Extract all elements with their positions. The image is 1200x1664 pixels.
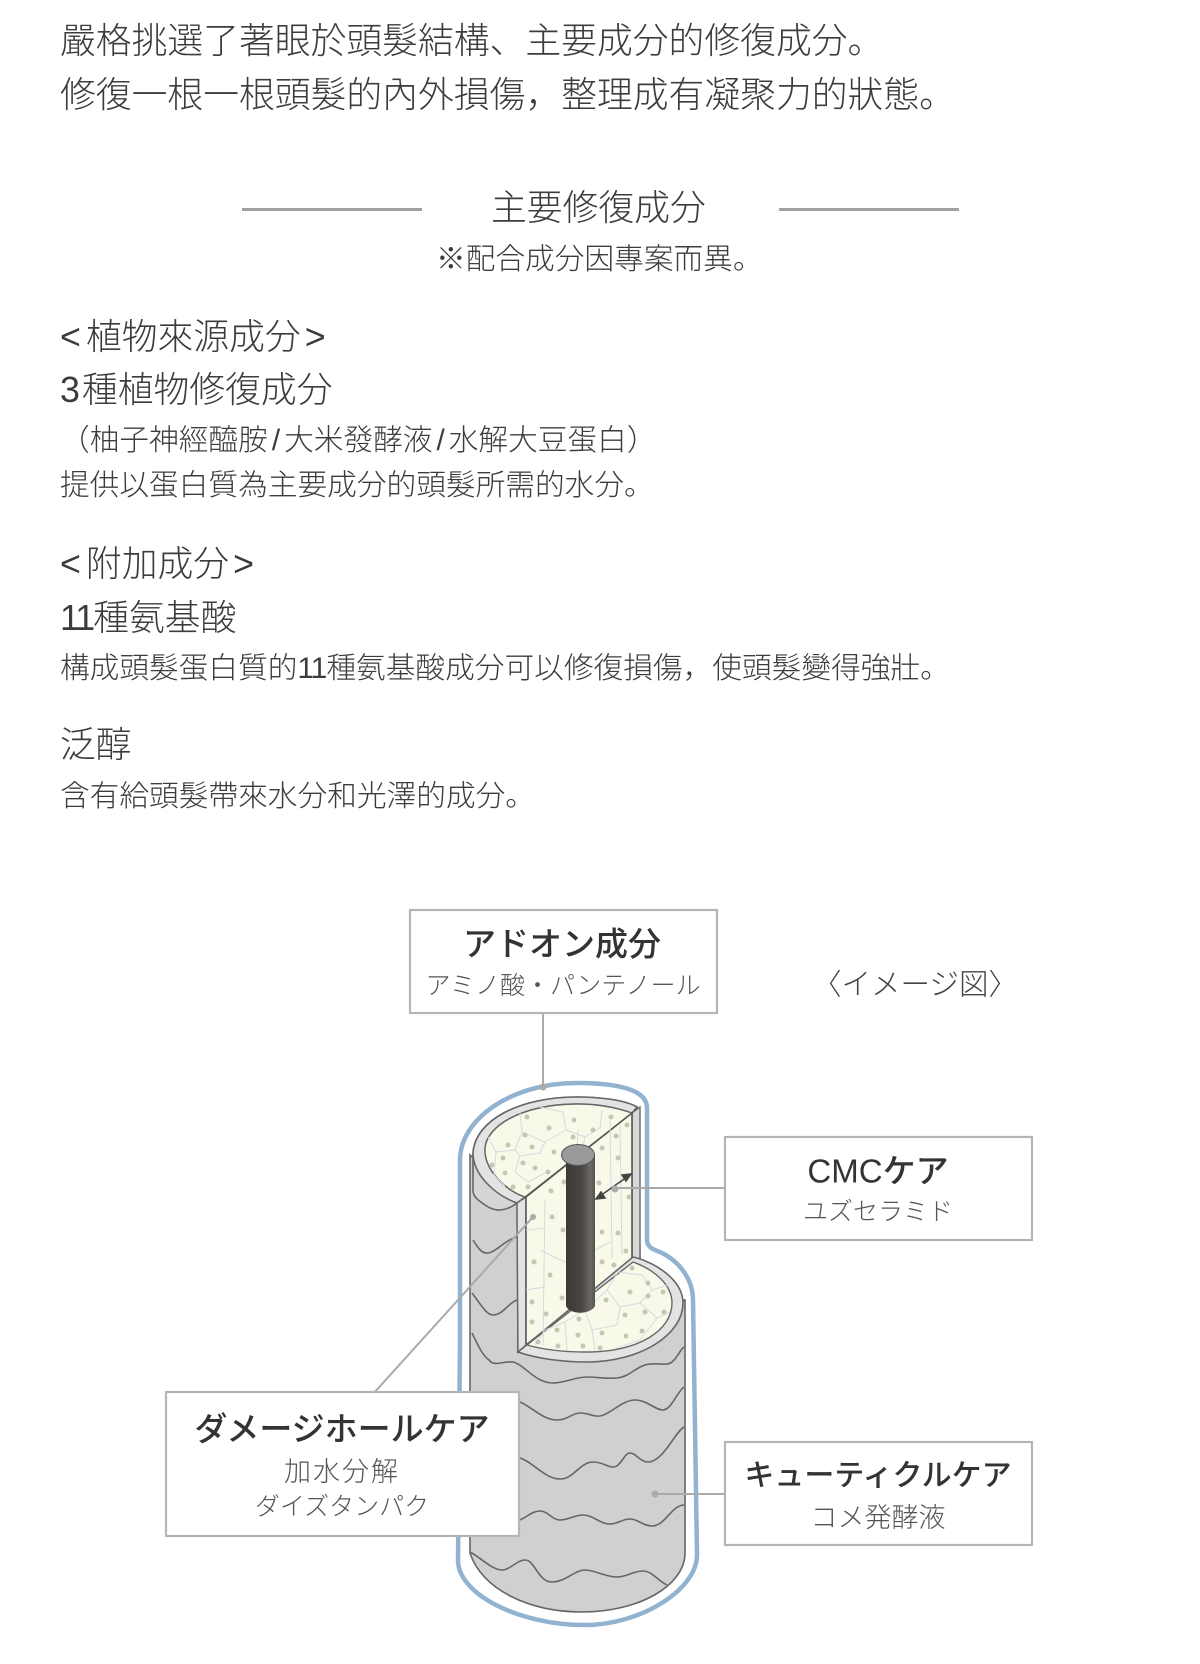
lower disc ring bbox=[518, 1257, 683, 1362]
add-on ingredients block: amino acids: 構成頭髮蛋白質的11種氨基酸成分可以修復損傷，使頭髮變得強壯。 bbox=[60, 652, 950, 685]
label box: add-on ingredients bbox=[410, 910, 717, 1013]
plant-derived ingredients block bbox=[60, 317, 657, 502]
plant-derived ingredients block: （柚子神經醯胺/大米發酵液/水解大豆蛋白） bbox=[60, 424, 657, 457]
intro text: 修復一根一根頭髮的內外損傷，整理成有凝聚力的狀態。 bbox=[60, 75, 955, 115]
plant-derived ingredients block: 提供以蛋白質為主要成分的頭髮所需的水分。 bbox=[60, 469, 654, 502]
cream inner: top half-disc bbox=[485, 1104, 632, 1197]
add-on ingredients block: amino acids: <附加成分> bbox=[60, 544, 257, 584]
gray cuticle body bbox=[470, 1155, 685, 1612]
label box: cuticle care bbox=[725, 1442, 1032, 1545]
label box: CMC care: ユズセラミド bbox=[803, 1198, 953, 1226]
label box: CMC care bbox=[725, 1137, 1032, 1240]
cream inner: lower half-disc bbox=[527, 1262, 672, 1352]
double arrow: CMC width bbox=[596, 1174, 631, 1199]
add-on ingredients block: amino acids: 11種氨基酸 bbox=[60, 598, 236, 638]
add-on ingredients block: panthenol bbox=[60, 725, 535, 813]
upper half: ring and shoulder bbox=[473, 1097, 640, 1352]
label box: add-on ingredients: アドオン成分 bbox=[463, 926, 661, 962]
blue outer coating outline bbox=[458, 1083, 697, 1625]
add-on ingredients block: amino acids bbox=[60, 544, 950, 685]
section heading: 主要修復成分 bbox=[242, 188, 959, 276]
cut face wall strips bbox=[517, 1197, 526, 1352]
label box: add-on ingredients: アミノ酸・パンテノール bbox=[425, 972, 701, 1000]
section heading: 主要修復成分: 主要修復成分 bbox=[491, 188, 706, 228]
add-on ingredients block: panthenol: 泛醇 bbox=[60, 725, 132, 765]
label box: cuticle care: コメ発酵液 bbox=[810, 1503, 946, 1533]
label box: damage hole care: 加水分解 bbox=[284, 1457, 400, 1487]
label box: damage hole care bbox=[166, 1392, 519, 1536]
plant-derived ingredients block: <植物來源成分> bbox=[60, 317, 329, 357]
cuticle waves bbox=[470, 1237, 684, 1585]
connector lines and dots bbox=[373, 1013, 727, 1498]
intro text: 嚴格挑選了著眼於頭髮結構、主要成分的修復成分。 bbox=[60, 21, 883, 61]
label box: damage hole care: ダメージホールケア bbox=[194, 1410, 490, 1448]
section heading: 主要修復成分: ※配合成分因專案而異。 bbox=[436, 243, 763, 276]
label box: damage hole care: ダイズタンパク bbox=[255, 1493, 429, 1521]
image note: 〈イメージ図〉 bbox=[812, 968, 1018, 1002]
cell walls bbox=[488, 1107, 670, 1350]
hair illustration bbox=[458, 1083, 697, 1625]
add-on ingredients block: panthenol: 含有給頭髮帶來水分和光澤的成分。 bbox=[60, 780, 535, 813]
cream inner: cut face bbox=[526, 1113, 632, 1345]
plant-derived ingredients block: 3種植物修復成分 bbox=[60, 370, 332, 410]
intro text bbox=[60, 21, 955, 115]
cell nuclei dots bbox=[490, 1114, 666, 1350]
label box: cuticle care: キューティクルケア bbox=[744, 1460, 1012, 1492]
central cortex rod bbox=[566, 1155, 595, 1313]
label box: CMC care: CMCケア bbox=[807, 1152, 949, 1190]
